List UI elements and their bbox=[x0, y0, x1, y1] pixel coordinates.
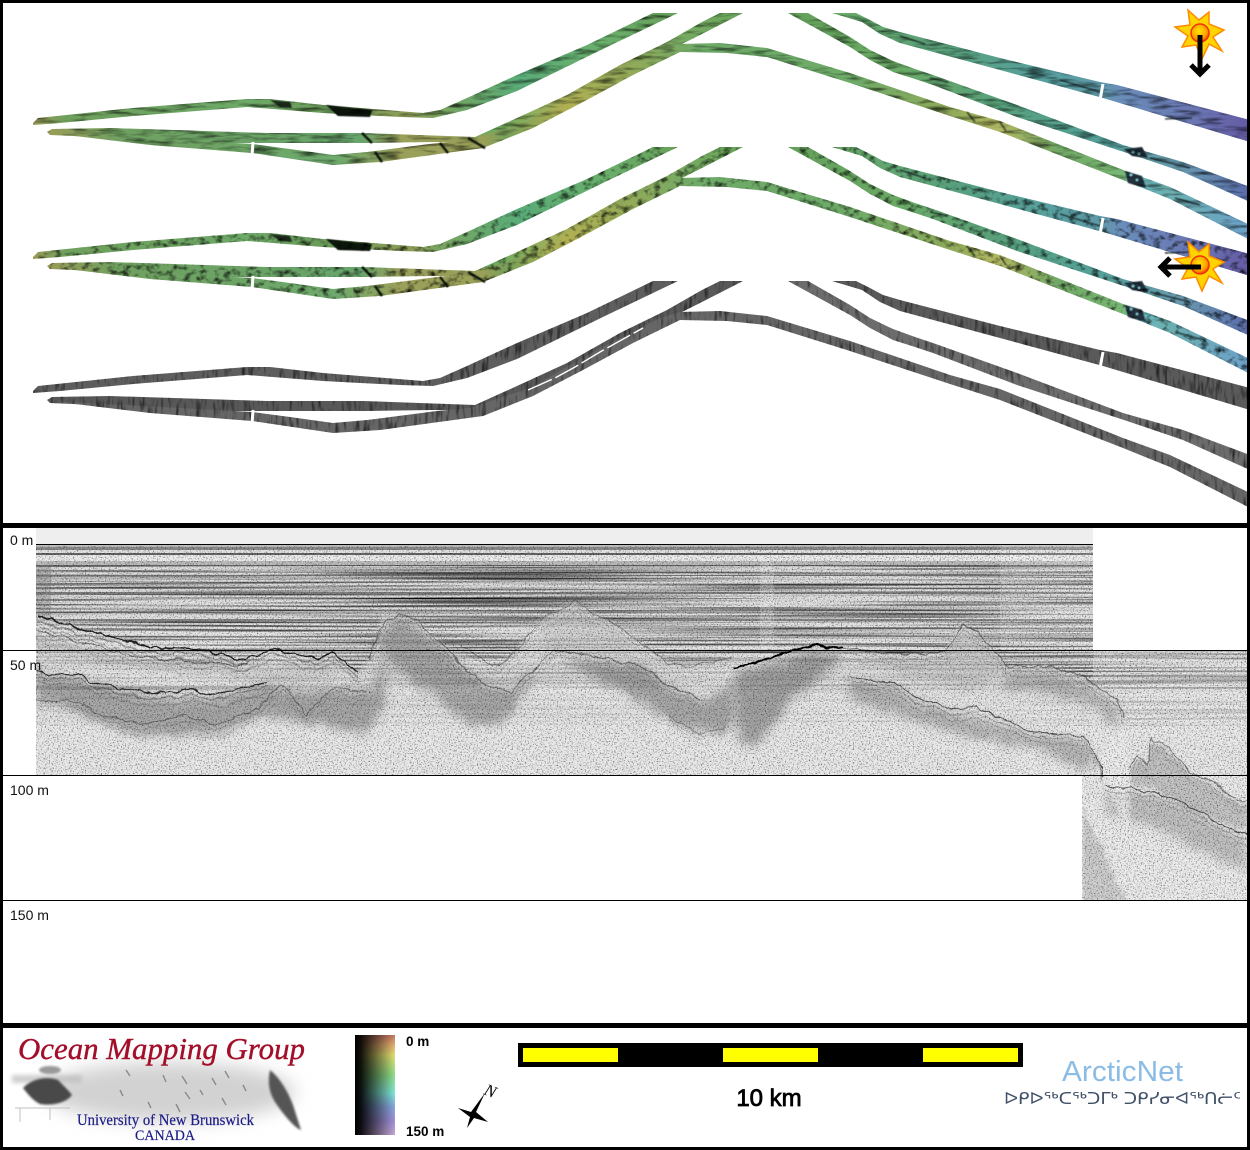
icon: north arrow bbox=[458, 1080, 501, 1128]
depth label: 50 m: 50 m bbox=[10, 657, 41, 673]
sediment body below seabed bbox=[36, 602, 1247, 901]
scale bar: 10 km bbox=[736, 1085, 802, 1112]
logo: ArcticNet bbox=[1004, 1056, 1241, 1109]
light column beneath escarpment bbox=[1098, 760, 1132, 825]
logo: ArcticNet: ᐅᑭᐅᖅᑕᖅᑐᒥᒃ ᑐᑭᓯᓂᐊᖅᑎᓖᑦ bbox=[1004, 1089, 1241, 1109]
logo: Ocean Mapping Group bbox=[12, 1031, 305, 1144]
panel: sub-bottom profile bbox=[3, 528, 1249, 923]
icon: north arrow: N bbox=[481, 1080, 501, 1103]
icon: sun, illumination from east bbox=[1175, 242, 1224, 291]
lighter water column right of the escarpment bbox=[1093, 651, 1247, 726]
swath seam gaps bbox=[252, 84, 1103, 424]
logo: Ocean Mapping Group: University of New Brunswick bbox=[77, 1112, 254, 1129]
icon: sun, illumination from north bbox=[1175, 10, 1224, 59]
logo: Ocean Mapping Group: CANADA bbox=[135, 1128, 195, 1144]
reflectors bbox=[36, 602, 1249, 846]
seismic echogram image bbox=[36, 528, 1249, 902]
coloured shaded-relief swaths, second sun angle bbox=[33, 147, 1250, 374]
fade of streaks in the deep sediment bbox=[36, 690, 1247, 726]
arrow: pointing west bbox=[1161, 258, 1201, 276]
scale bar bbox=[518, 1043, 1023, 1112]
logo: ArcticNet: ArcticNet bbox=[1062, 1056, 1183, 1088]
depth label: 100 m: 100 m bbox=[10, 782, 49, 798]
acoustic turbidity bands bbox=[36, 604, 1247, 901]
panel: legend footer bbox=[12, 1031, 1241, 1144]
logo: Ocean Mapping Group: Ocean Mapping Group bbox=[18, 1031, 305, 1066]
depth label: 0 m: 0 m bbox=[10, 532, 33, 548]
grey backscatter swaths bbox=[33, 281, 1250, 508]
depth label: 150 m: 150 m bbox=[10, 907, 49, 923]
speckle noise overlay bbox=[36, 546, 1247, 902]
panel: swath maps bbox=[33, 10, 1250, 508]
coloured shaded-relief swaths, first sun angle bbox=[33, 13, 1250, 240]
depth gridlines bbox=[3, 544, 1247, 900]
colour depth legend bbox=[355, 1034, 444, 1139]
arrow: pointing south bbox=[1191, 35, 1209, 74]
colour depth legend: 0 m bbox=[406, 1034, 429, 1049]
colour depth legend: 150 m bbox=[406, 1124, 444, 1139]
